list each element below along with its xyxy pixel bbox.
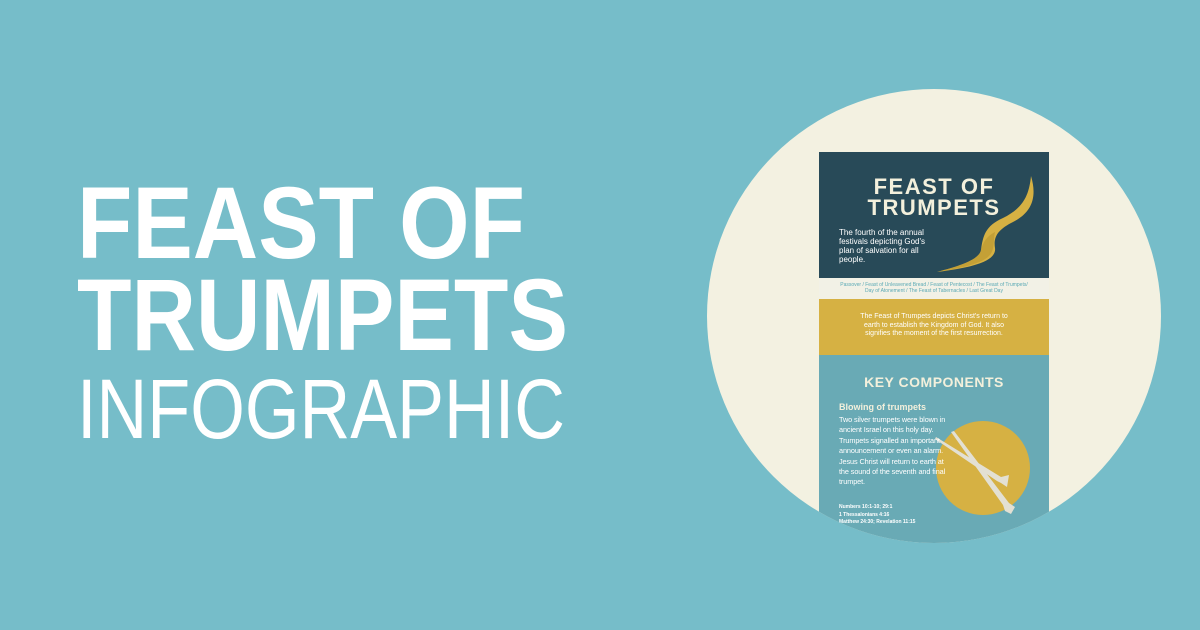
scripture references: Matthew 24:30; Revelation 11:15 [839, 519, 915, 525]
scripture references: 1 Thessalonians 4:16 [839, 512, 889, 518]
headline [77, 166, 568, 456]
gold summary panel [819, 299, 1049, 355]
headline: FEAST OF [77, 166, 525, 280]
nav bar [819, 278, 1049, 299]
card subtitle: The fourth of the annual festivals depicting God's plan of salvation for all people. [839, 228, 925, 264]
scripture references [839, 504, 916, 525]
headline: TRUMPETS [77, 258, 568, 372]
headline: INFOGRAPHIC [77, 362, 565, 456]
nav bar: Passover / Feast of Unleavened Bread / Feast of Pentecost / The Feast of Trumpets/ [840, 282, 1028, 288]
cream circle with infographic preview [707, 89, 1161, 543]
section heading: KEY COMPONENTS [864, 374, 1004, 390]
card title: FEAST OF [874, 174, 994, 199]
card header panel [819, 152, 1049, 278]
icon: golden trumpet wave [937, 176, 1034, 272]
key components panel [819, 355, 1049, 572]
component body text: Two silver trumpets were blown in ancient Israel on this holy day. Trumpets signalled an important announcement or even an alarm. Jesus Christ will return to earth at the sound of the seventh and final trumpet. [839, 415, 945, 486]
card title: TRUMPETS [868, 195, 1000, 220]
nav bar: Day of Atonement / The Feast of Tabernacles / Last Great Day [865, 288, 1003, 294]
icon: gold circle with trumpets [935, 421, 1030, 515]
card title [868, 174, 1000, 220]
scripture references: Numbers 10:1-10; 29:1 [839, 504, 892, 510]
gold summary panel: The Feast of Trumpets depicts Christ's return to earth to establish the Kingdom of God. It also signifies the moment of the first resurrection. [860, 313, 1008, 337]
infographic card [819, 152, 1049, 543]
component heading: Blowing of trumpets [839, 402, 926, 412]
